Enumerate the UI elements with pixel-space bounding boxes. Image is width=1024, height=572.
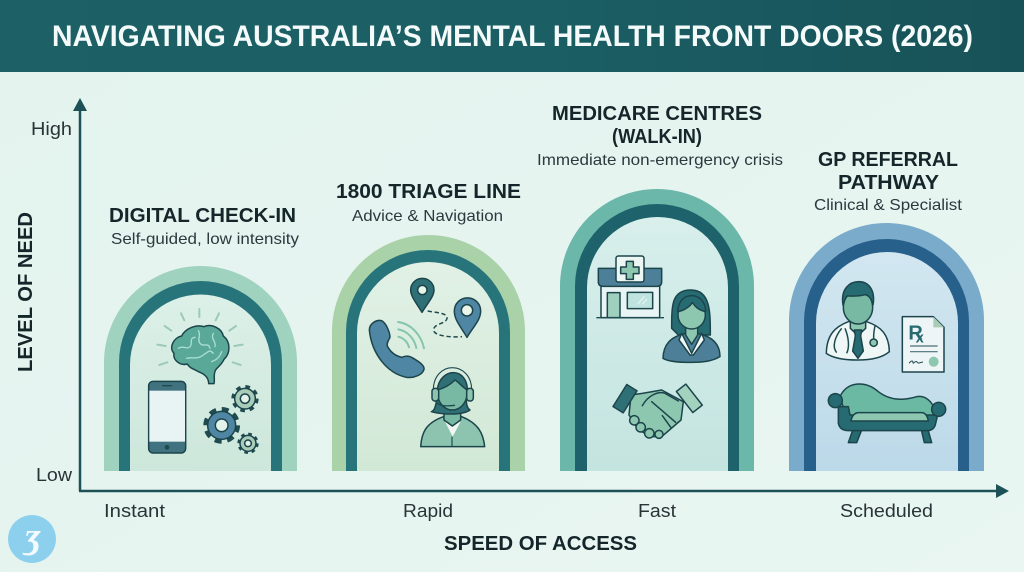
icon: doctor — [826, 282, 889, 360]
arch — [104, 266, 297, 471]
icons — [149, 309, 257, 453]
arch — [560, 189, 754, 471]
icons — [596, 256, 720, 438]
heading: MEDICARE CENTRES — [552, 103, 762, 125]
heading: PATHWAY — [838, 172, 940, 194]
icon: prescription — [902, 317, 944, 372]
scheduled label: Scheduled — [840, 501, 933, 521]
icon: small gear top — [234, 387, 256, 410]
axis title: LEVEL OF NEED — [15, 212, 37, 372]
heading: 1800 TRIAGE LINE — [336, 181, 521, 203]
low label: Low — [36, 465, 73, 485]
arch — [789, 223, 984, 471]
icon: brain — [157, 309, 243, 384]
title: NAVIGATING AUSTRALIA’S MENTAL HEALTH FRONT DOORS (2026) — [52, 20, 973, 53]
horizontal axis: speed of access — [79, 484, 1009, 555]
icon: headset agent — [421, 368, 485, 447]
panel: medicare centres — [537, 103, 783, 471]
icons — [369, 278, 485, 447]
panel: 1800 triage line — [332, 181, 525, 471]
icon: handshake — [613, 384, 702, 438]
icon: small gear bottom — [239, 435, 257, 452]
icon: smartphone — [149, 381, 186, 453]
axis title: SPEED OF ACCESS — [444, 533, 637, 555]
heading: (WALK-IN) — [612, 126, 702, 148]
heading: GP REFERRAL — [818, 149, 958, 171]
icons — [826, 282, 946, 443]
icon: large gear — [206, 410, 237, 441]
heading — [552, 103, 762, 148]
fast label: Fast — [638, 501, 676, 521]
subheading: Clinical & Specialist — [814, 197, 963, 214]
instant label: Instant — [104, 501, 165, 521]
icon: therapy couch — [828, 384, 946, 443]
subheading: Self-guided, low intensity — [111, 231, 299, 248]
icon: map pins and route — [411, 278, 481, 337]
heading — [818, 149, 958, 194]
header banner — [0, 0, 1024, 72]
vertical axis: level of need — [15, 98, 87, 491]
arch — [332, 235, 525, 471]
rapid label: Rapid — [403, 501, 453, 521]
high label: High — [31, 119, 72, 139]
icon: clinician — [663, 290, 720, 362]
icon: prescription: x — [916, 331, 925, 347]
prescription symbol: R — [908, 322, 923, 344]
panel: digital check-in — [104, 205, 299, 471]
logo badge — [8, 515, 56, 563]
logo badge: ʒ — [23, 516, 42, 556]
panel: gp referral pathway — [789, 149, 984, 471]
subheading: Immediate non-emergency crisis — [537, 152, 783, 169]
icon: clinic building — [596, 256, 664, 318]
subheading: Advice & Navigation — [352, 208, 503, 225]
icon: telephone and signal — [369, 320, 424, 378]
heading: DIGITAL CHECK-IN — [109, 205, 296, 227]
